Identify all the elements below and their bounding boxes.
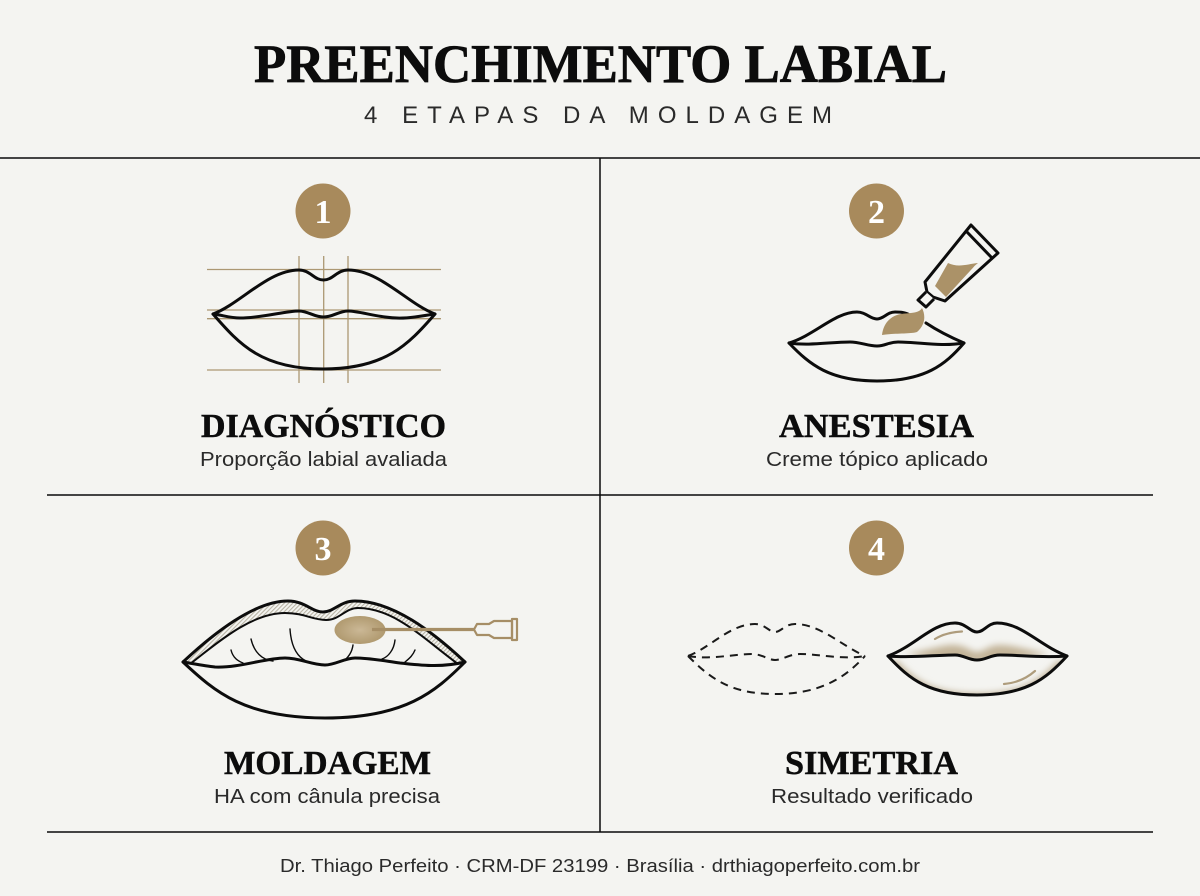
subtitle: 4 ETAPAS DA MOLDAGEM (364, 102, 832, 129)
hatched filler band (183, 601, 465, 664)
icon: shaded lips after (888, 623, 1067, 697)
number badge 4: 4 (868, 531, 885, 568)
heading: ANESTESIA (779, 408, 974, 445)
number badge 3: 3 (314, 531, 332, 568)
icon: lips with cannula and filler (183, 601, 517, 718)
number badge 2 (849, 184, 904, 238)
heading: DIAGNÓSTICO (201, 407, 446, 445)
panel: step 4 simetria (688, 520, 1067, 808)
panel: step 2 anestesia (766, 184, 998, 471)
footer: Dr. Thiago Perfeito · CRM-DF 23199 · Brasília · drthiagoperfeito.com.br (280, 855, 920, 876)
icon: dashed lips before (688, 624, 865, 694)
number badge 4 (849, 520, 904, 576)
panel: step 3 moldagem (183, 520, 517, 808)
description: Proporção labial avaliada (200, 448, 448, 471)
number badge 1 (296, 184, 350, 238)
icon: lips with anesthetic cream tube (789, 225, 998, 381)
icon: lips with proportion grid (207, 256, 441, 383)
cannula (372, 619, 517, 640)
number badge 2: 2 (868, 194, 885, 231)
number badge 1: 1 (314, 194, 332, 231)
filler bolus (334, 616, 386, 644)
description: Resultado verificado (771, 785, 973, 808)
panel: step 1 diagnóstico (200, 184, 448, 471)
description: Creme tópico aplicado (766, 448, 988, 471)
cream smear (882, 308, 924, 335)
description: HA com cânula precisa (214, 785, 441, 808)
cream tube (918, 225, 998, 307)
heading: MOLDAGEM (224, 745, 431, 782)
number badge 3 (296, 520, 350, 576)
title: PREENCHIMENTO LABIAL (254, 34, 947, 94)
heading: SIMETRIA (785, 745, 958, 782)
